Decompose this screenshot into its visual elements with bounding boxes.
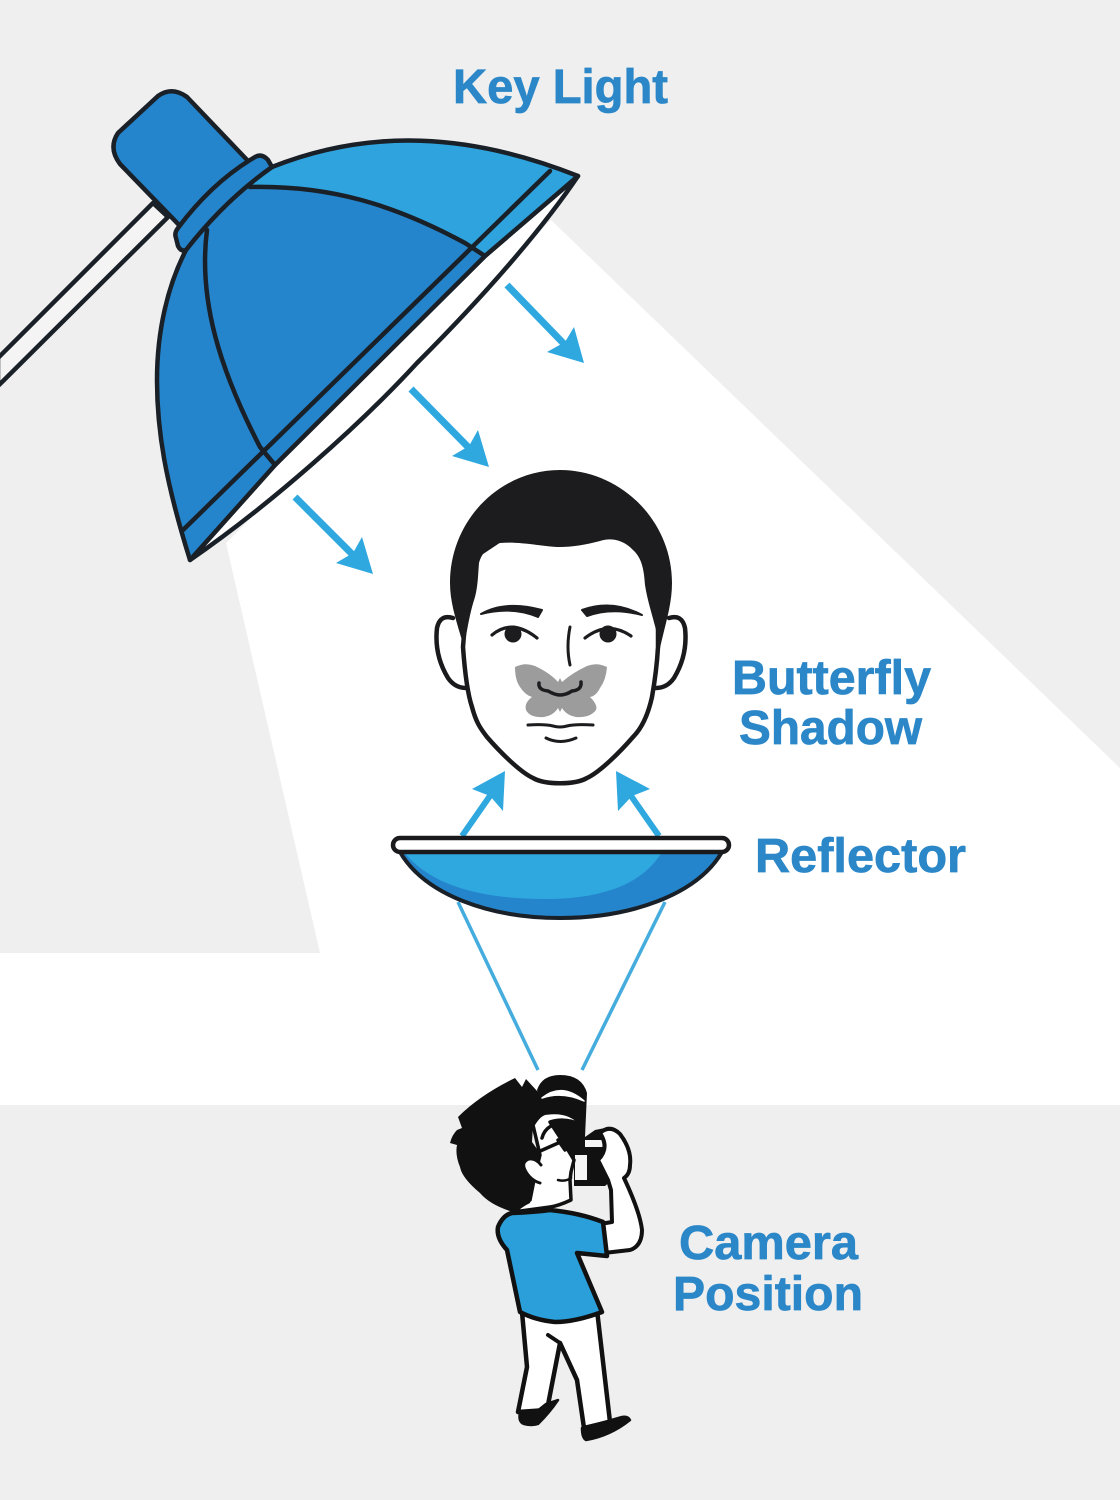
light beam [0, 220, 1120, 1105]
shoes [520, 1400, 630, 1440]
t-shirt [498, 1210, 607, 1322]
label: Butterfly Shadow: Butterfly [732, 652, 931, 705]
icon: photographer [450, 1075, 642, 1440]
lamp arm [0, 203, 168, 386]
lamp dome [157, 141, 578, 560]
arrows: key light rays [295, 285, 584, 574]
butterfly shadow [515, 664, 607, 717]
reflected arrow right [616, 771, 659, 836]
glasses [538, 1140, 565, 1152]
hair [450, 1078, 546, 1212]
reflector outline [400, 852, 722, 918]
label: Key Light: Key Light [453, 61, 668, 114]
dome highlight [250, 141, 575, 256]
lamp head [113, 91, 250, 228]
reflector rim [393, 838, 729, 852]
nostrils [539, 682, 581, 695]
camera details [575, 1140, 603, 1180]
light ray arrow right [507, 285, 584, 363]
camera body [550, 1122, 615, 1186]
reflected arrow left [462, 771, 505, 836]
pants [518, 1310, 610, 1428]
hair [450, 470, 672, 648]
camera lens [537, 1075, 587, 1137]
reflector highlight [404, 852, 662, 899]
reflector bowl [400, 852, 722, 918]
face outline [463, 500, 658, 783]
label: Reflector: Reflector [755, 830, 966, 883]
dome outline and seams [157, 141, 578, 560]
smile [558, 1178, 571, 1181]
trouser fold [548, 1335, 560, 1343]
label: Butterfly Shadow [732, 652, 931, 755]
face and neck [513, 1112, 582, 1212]
ears [436, 617, 686, 688]
arrows: reflected light [462, 771, 659, 836]
label: Butterfly Shadow: Shadow [739, 702, 923, 755]
raised arm and hand [598, 1129, 642, 1253]
mouth [528, 725, 593, 742]
label: Camera Position [673, 1217, 863, 1321]
light ray arrow left [295, 497, 373, 574]
label: Camera Position: Position [673, 1268, 863, 1321]
icon: face with butterfly shadow [436, 470, 686, 783]
nose line [568, 627, 570, 665]
label: Camera Position: Camera [679, 1217, 858, 1270]
eyebrows [481, 606, 642, 617]
icon: key light lamp [0, 91, 578, 560]
lamp collar [175, 156, 272, 250]
ear [524, 1159, 541, 1183]
white diffuser lens [190, 176, 578, 560]
light ray arrow middle [411, 389, 489, 467]
camera sight lines [458, 902, 665, 1070]
forehead hair lock [542, 1126, 551, 1138]
eyes [492, 626, 631, 642]
lens highlight [542, 1091, 584, 1101]
icon: reflector [393, 838, 729, 918]
